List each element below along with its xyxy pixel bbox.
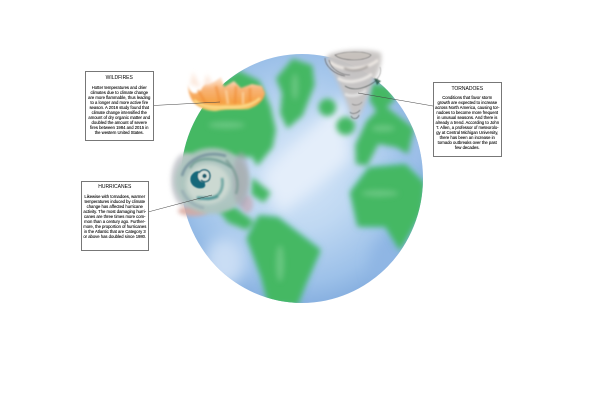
land: Africa [350, 164, 425, 251]
continents [178, 59, 425, 306]
text: hurricanes: canes are three times more com- [84, 214, 145, 219]
land: British Isles [336, 117, 355, 135]
panel: wildfires [85, 71, 154, 140]
panel: tornadoes [433, 82, 502, 157]
text: tornadoes [435, 94, 500, 150]
text: hurricanes: Likewise with tornadoes, warmer [84, 194, 145, 198]
land streaks [208, 73, 398, 282]
text: wildfires: are more flammable, thus leading [88, 95, 150, 100]
text: hurricanes: or above has doubled since 1980. [83, 234, 146, 239]
text: tornadoes: in unusual seasons. And there is [437, 115, 497, 120]
text: tornadoes: already a trend. According to John [435, 120, 499, 125]
text: hurricanes: in the Atlantic that are Category 3 [84, 229, 146, 234]
land: Greenland [276, 59, 315, 129]
text: wildfires: climates due to climate change [90, 90, 148, 95]
icon: tornado [325, 50, 381, 119]
land: Europe [355, 104, 414, 166]
text: hurricanes [83, 194, 146, 239]
text: tornadoes: growth are expected to increase [437, 100, 497, 105]
text: tornadoes: gy at Central Michigan University, [436, 130, 498, 135]
text: hurricanes: temperatures induced by climate [84, 199, 145, 204]
land: North America [178, 71, 276, 166]
text: tornadoes: there has been an increase in [440, 135, 495, 140]
text: tornadoes: across North America, causing tor- [435, 105, 499, 110]
text: wildfires: season. A 2016 study found that [89, 105, 149, 110]
text: wildfires: amount of dry organic matter and [88, 115, 150, 120]
icon: hurricane [171, 148, 253, 216]
text: hurricanes: mon than a century ago. Further- [84, 219, 145, 224]
text: wildfires: fires between 1984 and 2015 in [90, 125, 148, 130]
hurricane eye [190, 170, 211, 188]
globe [178, 54, 427, 306]
text: hurricanes: change has affected hurricane [87, 204, 143, 209]
heading: tornadoes: TORNADOES [451, 86, 483, 92]
leader line: tornadoes [358, 93, 433, 106]
land: Florida [251, 178, 271, 203]
text: wildfires: Hotter temperatures and drier [92, 85, 147, 90]
text: wildfires: the western United States. [95, 130, 144, 135]
text: wildfires [88, 85, 150, 135]
leader line: wildfires [153, 102, 220, 106]
ocean highlights [205, 95, 427, 292]
land halo [250, 165, 423, 303]
text: tornadoes: tornado outbreaks over the past [438, 140, 497, 145]
text: tornadoes: Conditions that favor storm [442, 94, 492, 100]
heading: wildfires: WILDFIRES [106, 75, 133, 81]
illustration: globe with disasters [149, 48, 433, 303]
text: wildfires: doubled the amount of severe [92, 120, 147, 125]
text: tornadoes: nadoes to become more frequent [436, 110, 498, 115]
panel: hurricanes [81, 181, 148, 250]
text: hurricanes: more, the proportion of hurricanes [83, 224, 146, 229]
text: wildfires: climate change intensified the [92, 110, 147, 115]
heading: hurricanes: HURRICANES [98, 184, 131, 190]
icon: wildfire flames [188, 72, 265, 111]
land: Scandinavia [369, 83, 395, 114]
text: tornadoes: few decades. [455, 145, 480, 150]
text: tornadoes: T. Allen, a professor of meteorolo- [436, 125, 499, 130]
land: Central America [218, 206, 254, 230]
text: wildfires: to a longer and more active fire [90, 100, 148, 105]
leader line: hurricanes [148, 195, 212, 212]
text: hurricanes: activity. The most damaging hurri- [83, 209, 146, 214]
land: South America [247, 215, 321, 306]
land: Iceland [319, 99, 336, 116]
